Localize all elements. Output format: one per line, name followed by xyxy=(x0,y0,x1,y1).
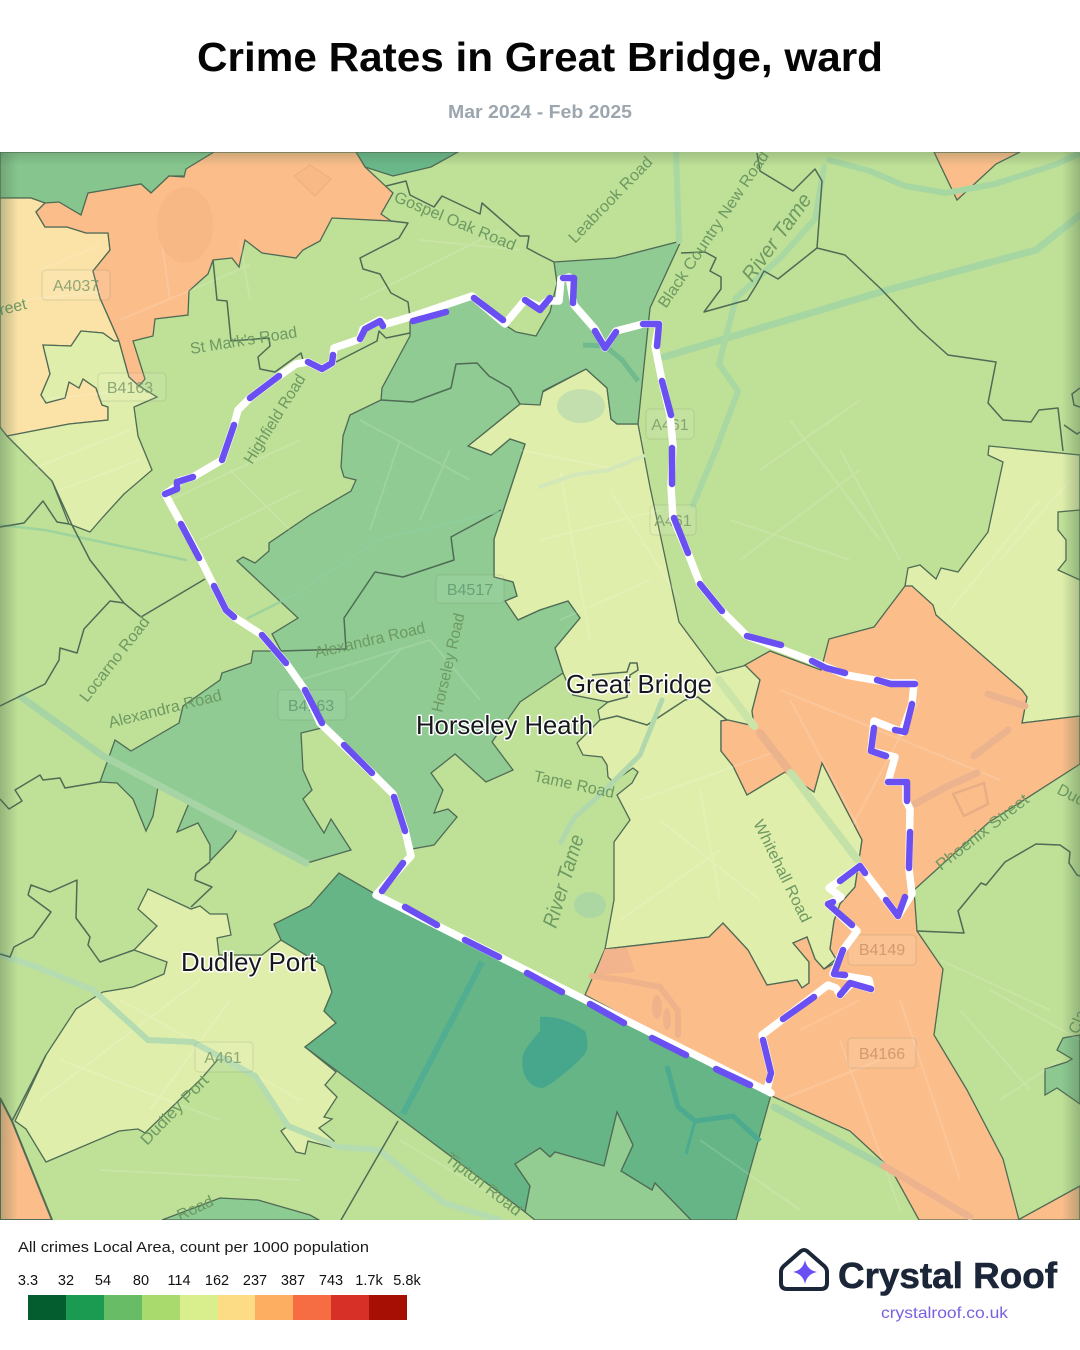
area: top-centre dark green xyxy=(356,152,458,176)
area: south-east orange xyxy=(585,586,1080,1220)
legend scale labels: 5.8k xyxy=(393,1273,421,1289)
road and river labels: Leabrook Road xyxy=(566,154,656,247)
place labels: Dudley Port xyxy=(181,947,317,977)
road and river labels: River Tame xyxy=(539,832,589,930)
road shields: B4517 xyxy=(447,582,493,599)
icon: house with star xyxy=(781,1250,827,1289)
road shields: B4163 xyxy=(107,380,153,397)
icon: stadium xyxy=(953,783,988,816)
area: Horseley Heath mid green xyxy=(100,241,681,863)
ward boundary lines in base xyxy=(0,153,1080,1220)
area: Tipton dark green xyxy=(274,873,771,1220)
logo: Crystal Roof xyxy=(781,1250,1058,1322)
title: Crime Rates in Great Bridge, ward xyxy=(197,34,883,80)
road and river labels: Dudley Port xyxy=(138,1072,213,1149)
road and river labels: Tame Road xyxy=(532,768,616,802)
area: far-right mid green xyxy=(1045,1035,1080,1104)
area: bottom-right orange corner xyxy=(1018,1186,1080,1220)
road shields: A461 xyxy=(654,513,692,530)
street network: pale roads xyxy=(20,230,1080,1210)
road and river labels: Gospel Oak Road xyxy=(391,189,518,254)
logo wordmark: Crystal Roof xyxy=(838,1255,1058,1296)
road and river labels: Locarno Road xyxy=(77,614,154,705)
road and river labels: Whitehall Road xyxy=(749,817,814,925)
area: east green inclusion xyxy=(1058,510,1080,580)
area: lake in dark green xyxy=(522,1017,588,1088)
choropleth map panel xyxy=(0,148,1080,1225)
road and river labels: Tipton Road xyxy=(442,1150,525,1220)
road and river labels: Phoenix Street xyxy=(933,791,1033,874)
legend scale labels: 54 xyxy=(95,1273,111,1289)
road shields: A461 xyxy=(204,1050,242,1067)
website url: crystalroof.co.uk xyxy=(881,1305,1009,1322)
area: stream in mid green xyxy=(583,345,638,381)
place labels: Great Bridge xyxy=(566,669,712,699)
area: north-west cream xyxy=(0,198,119,436)
legend scale labels: 3.3 xyxy=(18,1273,38,1289)
road shields: A4037 xyxy=(53,278,99,295)
legend colour swatches xyxy=(28,1295,407,1320)
area: central yellow-green, Great Bridge xyxy=(468,369,862,988)
legend scale labels: 237 xyxy=(243,1273,267,1289)
map base: light green areas xyxy=(0,152,1080,1220)
area: stream in dark green xyxy=(667,1066,760,1141)
area: bottom mid green xyxy=(162,1198,319,1220)
subtitle: date range: Mar 2024 - Feb 2025 xyxy=(448,102,632,122)
legend scale labels xyxy=(18,1273,421,1289)
road and river labels: River Tame xyxy=(737,189,817,286)
place labels xyxy=(181,669,712,977)
area: east yellow-green xyxy=(905,446,1080,723)
boundary white underlay xyxy=(165,277,914,1093)
place labels: Horseley Heath xyxy=(416,710,593,740)
ward boundary: white line with purple dashes xyxy=(165,277,915,1093)
patches xyxy=(574,892,606,918)
legend scale labels: 32 xyxy=(58,1273,74,1289)
road shields: B4163 xyxy=(288,698,334,715)
road shields: A461 xyxy=(651,417,689,434)
road and river labels: Alexandra Road xyxy=(107,687,224,732)
legend scale labels: 1.7k xyxy=(355,1273,383,1289)
legend scale labels: 162 xyxy=(205,1273,229,1289)
road shields: B4166 xyxy=(859,1046,905,1063)
area: south-west orange corner xyxy=(0,1098,52,1220)
area: canal across dark green xyxy=(403,962,482,1114)
legend scale labels: 387 xyxy=(281,1273,305,1289)
road and river labels: Highfield Road xyxy=(241,372,309,467)
boundary purple dashes xyxy=(165,278,915,1085)
area: lower mid green below dark green xyxy=(515,1112,691,1220)
legend scale labels: 114 xyxy=(167,1273,191,1289)
area: north-east orange xyxy=(934,152,1020,200)
road and river labels: Alexandra Road xyxy=(313,620,427,662)
area: Dudley Port yellow-green xyxy=(15,889,337,1162)
road and river labels xyxy=(0,148,1080,1225)
road and river labels: Black Country New Road xyxy=(655,148,773,311)
road and river labels: Horseley Road xyxy=(429,612,469,714)
area: north-west yellow-green xyxy=(7,331,157,532)
canals and rivers xyxy=(0,152,1080,1220)
legend title: All crimes Local Area, count per 1000 population xyxy=(18,1239,369,1256)
road and river labels: Road xyxy=(175,1193,216,1225)
road shields xyxy=(42,270,916,1072)
road and river labels: St Mark's Road xyxy=(189,324,298,358)
road shields: B4149 xyxy=(859,942,905,959)
legend scale labels: 80 xyxy=(133,1273,149,1289)
legend xyxy=(18,1239,421,1320)
area: top-left green xyxy=(0,152,215,215)
area: north orange xyxy=(36,152,393,386)
area: lake north of centre xyxy=(557,389,605,423)
legend scale labels: 743 xyxy=(319,1273,343,1289)
